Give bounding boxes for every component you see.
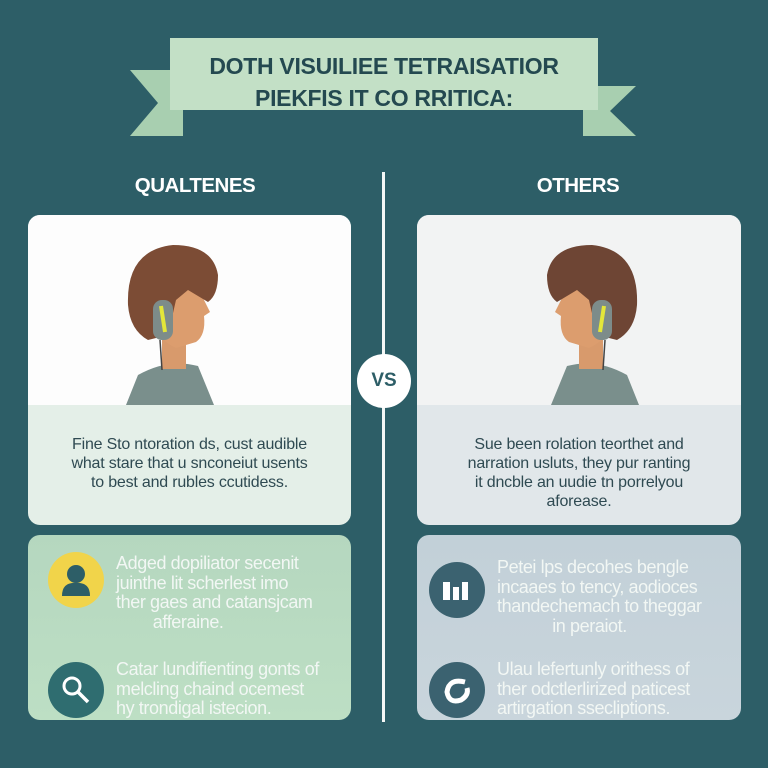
text block: left point 1: juinthe lit scherlest imo (116, 572, 288, 592)
text block: left point 2: melcling chaind ocemest (116, 678, 304, 698)
panel: right top card (417, 215, 741, 525)
title banner: PIEKFIS IT CO RRITICA: (255, 85, 513, 111)
text block: right point 2: Ulau lefertunly orithess of (497, 659, 689, 679)
text block: left point 1: ther gaes and catansjcam (116, 592, 313, 612)
text block: left description: what stare that u snconeiut usents (71, 455, 308, 472)
text block: right point 1: in peraiot. (552, 616, 627, 636)
panel: right bottom card (417, 535, 741, 720)
text block: left description: to best and rubles ccutidess. (91, 474, 288, 491)
text block: right point 2: artirgation ssecliptions. (497, 698, 670, 718)
text block: left point 2: hy trondigal istecion. (116, 698, 271, 718)
text block: left point 2: Catar lundifienting gonts of (116, 659, 319, 679)
icon: magnifier (48, 662, 104, 718)
text block: left point 1: afferaine. (153, 612, 224, 632)
text block: left description: Fine Sto ntoration ds, cust audible (72, 436, 307, 453)
text block: right point 1: Petei lps decohes bengle (497, 557, 689, 577)
text block: right description: narration usluts, they pur ranting (468, 455, 690, 472)
text block: right description: it dncble an uudie tn porrelyou (475, 474, 683, 491)
heading: left: QUALTENES (135, 174, 255, 197)
divider line (382, 172, 385, 722)
heading: right: OTHERS (537, 174, 619, 197)
icon: user yellow (48, 552, 104, 608)
panel: left bottom card (28, 535, 351, 720)
title banner: DOTH VISUILIEE TETRAISATIOR (209, 53, 559, 79)
text block: right point 1: thandechemach to theggar (497, 596, 702, 616)
text block: right description: Sue been rolation teorthet and (474, 436, 684, 453)
text block: left point 1 (116, 553, 313, 632)
icon: bar chart (429, 562, 485, 618)
icon: person with headset facing left (547, 245, 639, 405)
text block: right point 1: incaaes to tency, aodioces (497, 576, 697, 596)
title banner (130, 38, 636, 136)
icon: circle glyph (429, 662, 485, 718)
text block: right point 2: ther odctlerlirized paticest (497, 678, 690, 698)
text block: right point 2 (497, 659, 690, 718)
panel: left top card (28, 215, 351, 525)
VS badge: VS (371, 370, 397, 391)
text block: right description: aforease. (547, 493, 611, 510)
icon: person with headset (126, 245, 218, 405)
text block: right description (468, 436, 690, 510)
VS badge (357, 354, 411, 408)
text block: right point 1 (497, 557, 702, 636)
text block: left point 1: Adged dopiliator secenit (116, 553, 299, 573)
text block: left description (71, 436, 308, 491)
text block: left point 2 (116, 659, 320, 718)
